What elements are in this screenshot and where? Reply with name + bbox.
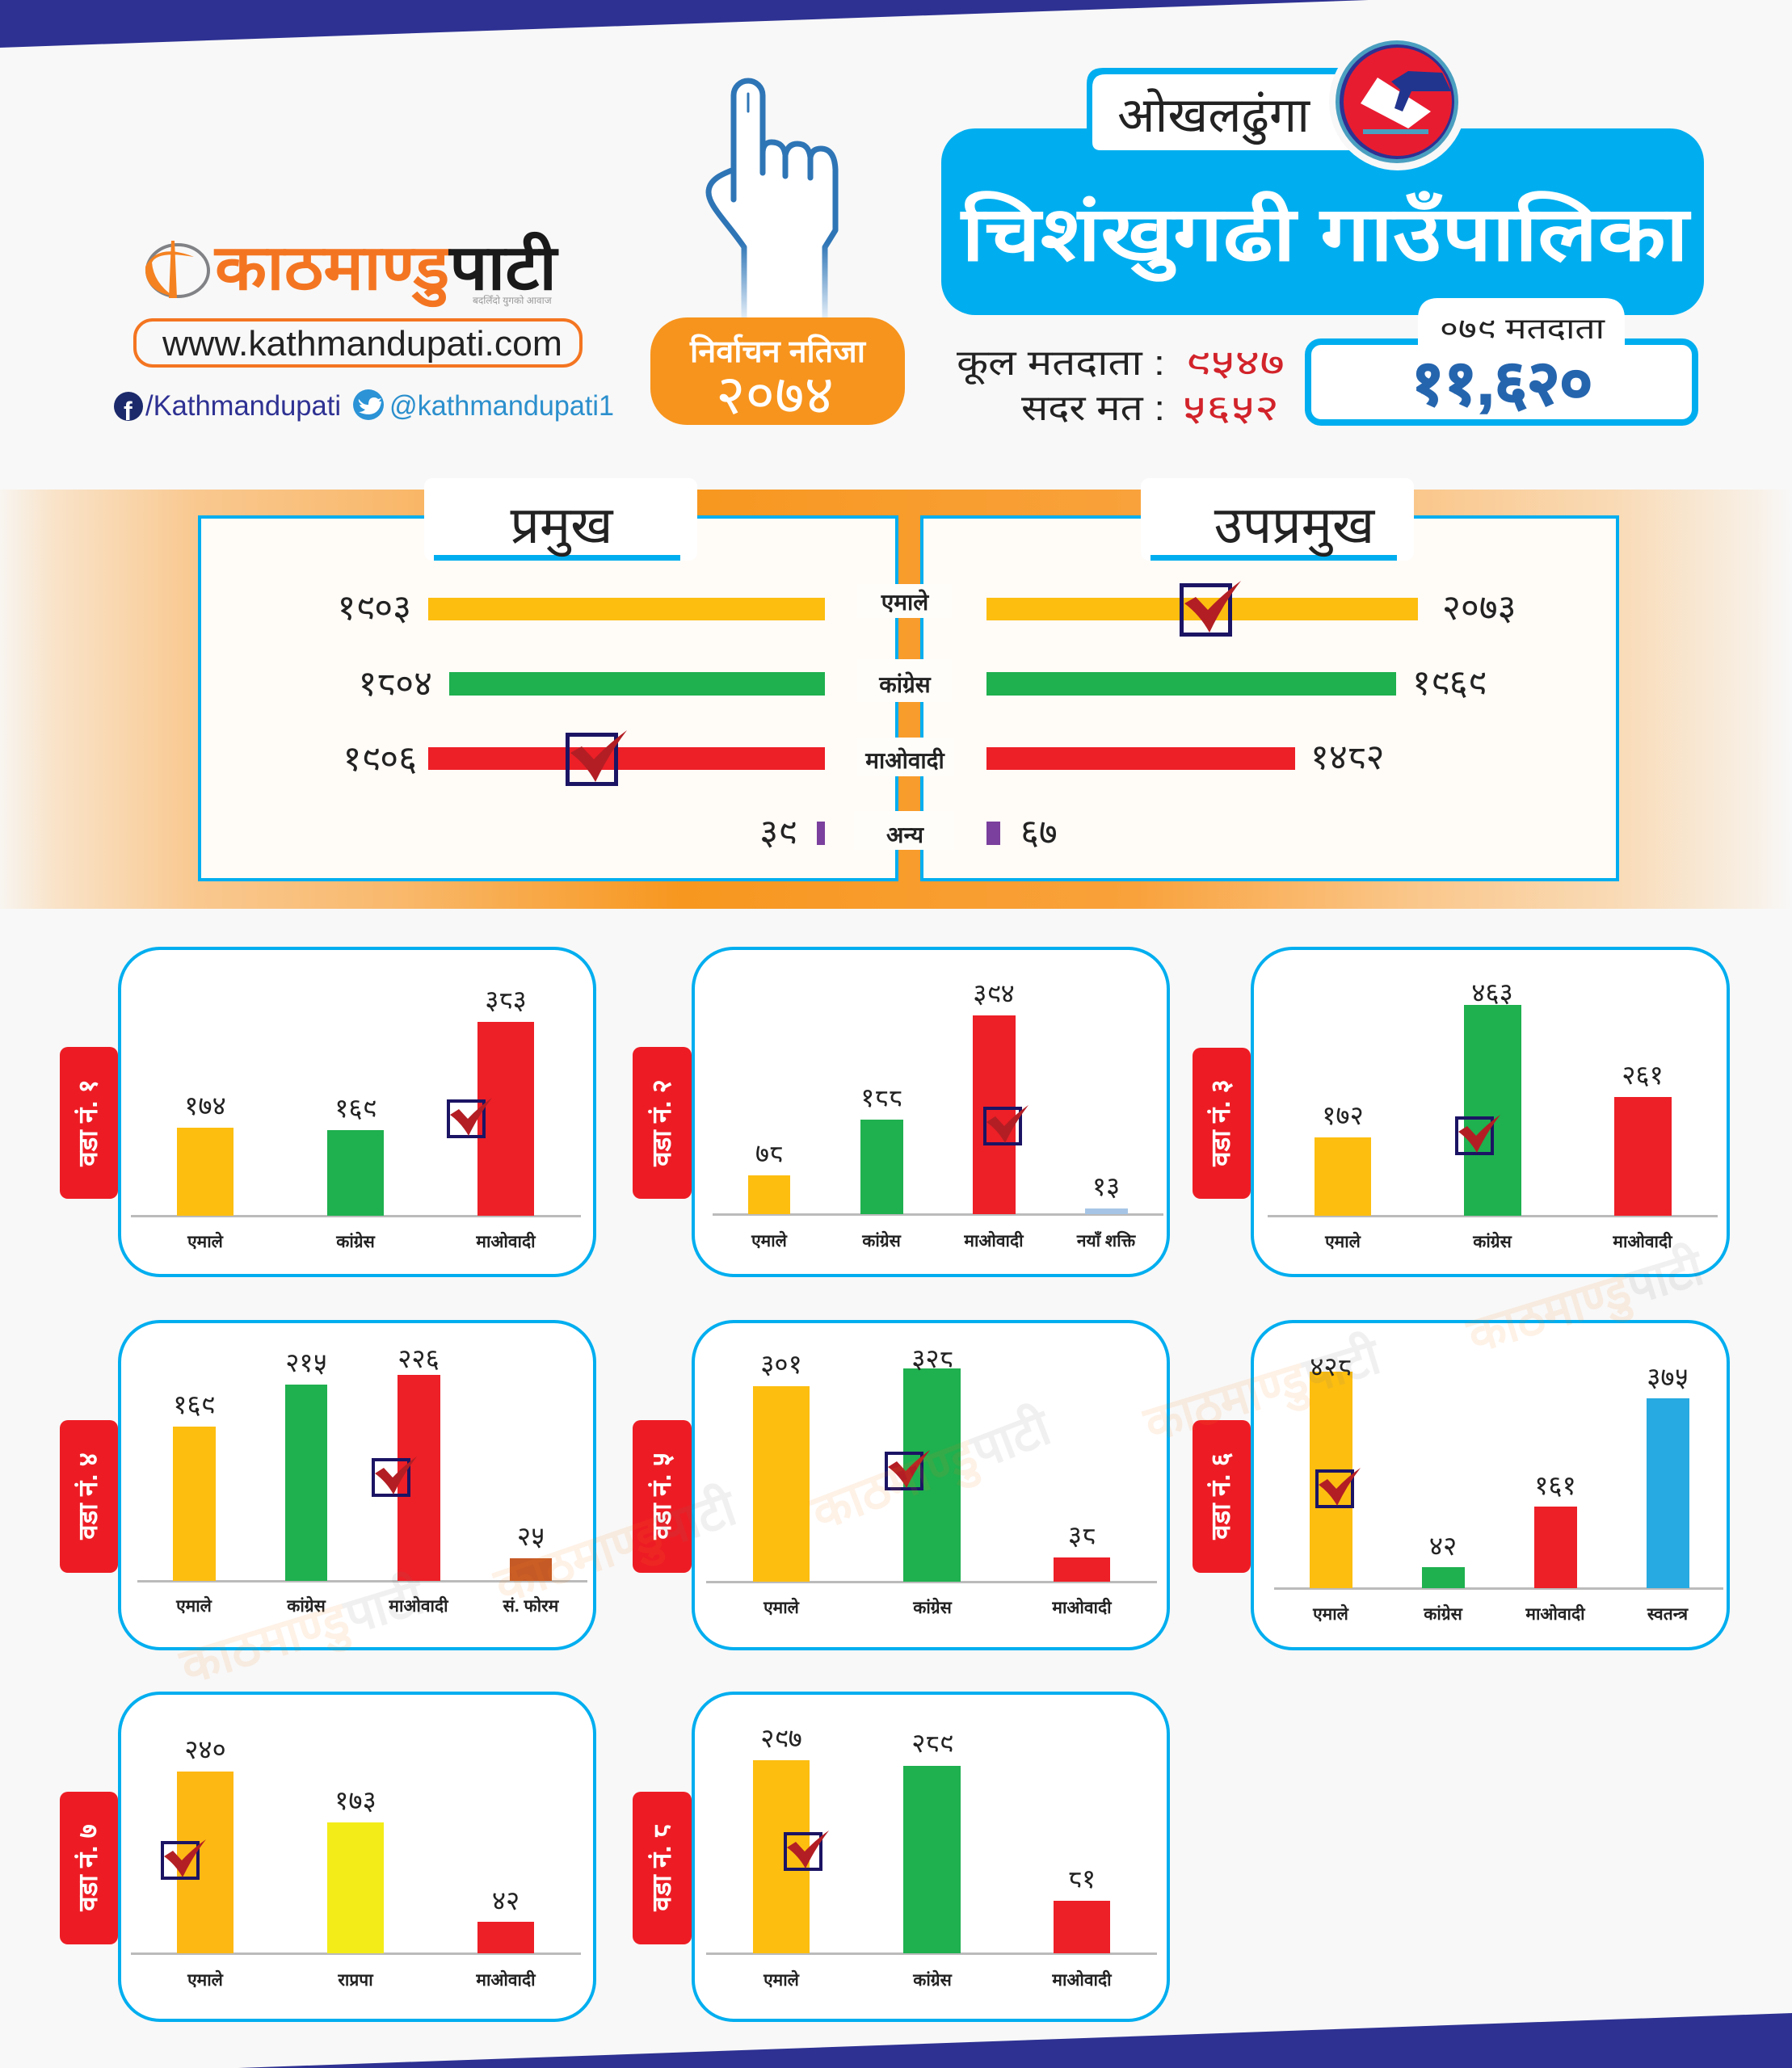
logo: Kathmandupati xyxy=(145,231,559,308)
ward 5 chart: ३२८ xyxy=(911,1343,953,1373)
top navy band xyxy=(0,0,1369,48)
ward 1 tab xyxy=(60,1047,118,1199)
icon: facebook: f xyxy=(124,397,133,426)
watermarks: काठमाण्डुपाटी xyxy=(803,1398,1061,1545)
ward 1 xyxy=(60,948,595,1276)
ward 7 chart: २४० xyxy=(184,1734,226,1764)
mayor heading tab xyxy=(424,478,697,561)
ward 3 chart: कांग्रेस xyxy=(1472,1231,1512,1251)
ward 3 chart: २६१ xyxy=(1622,1060,1664,1090)
ward 3 winner check xyxy=(1457,1115,1500,1154)
ward 2 chart: ३९४ xyxy=(973,978,1015,1008)
ward 6 chart: १६१ xyxy=(1534,1470,1576,1500)
municipality title panel xyxy=(941,33,1704,315)
ward 2 xyxy=(633,948,1168,1276)
district tab: ओखलढुंगा xyxy=(1117,88,1310,145)
ward 4 chart: १६९ xyxy=(173,1389,215,1419)
deputy value: Congress: १९६९ xyxy=(1412,663,1487,703)
ward 7 xyxy=(60,1693,595,2020)
ward 1 chart: १६९ xyxy=(334,1093,376,1123)
ward 4 xyxy=(60,1322,595,1649)
ward 3 tab: वडा नं. ३ xyxy=(1205,1079,1235,1167)
ward 6 chart: ४२ xyxy=(1429,1531,1457,1561)
ward 8 chart xyxy=(706,1723,1157,1990)
ward 4 tab: वडा नं. ४ xyxy=(73,1452,103,1540)
watermarks: काठमाण्डुपाटी xyxy=(1137,1326,1389,1456)
voters tab xyxy=(1418,298,1625,347)
ward 6 tab xyxy=(1193,1420,1251,1573)
ward 8 chart: २९७ xyxy=(760,1723,802,1753)
watermarks: काठमाण्डुपाटी xyxy=(487,1478,746,1617)
ward 3 tab xyxy=(1193,1048,1251,1199)
ward 6 chart: ४२८ xyxy=(1310,1351,1352,1381)
twitter handle: @kathmandupati1 xyxy=(389,390,614,422)
mayor bar: UML xyxy=(428,598,825,620)
ward 5 chart xyxy=(706,1343,1157,1617)
ward 1 tab: वडा नं. १ xyxy=(73,1079,103,1167)
ward 5 chart: ३८ xyxy=(1068,1520,1096,1550)
total voters text xyxy=(957,343,1285,428)
ward 8 winner check xyxy=(785,1831,829,1869)
ward 1 chart: १७४ xyxy=(184,1091,226,1120)
mayor bar: other xyxy=(817,822,825,845)
ward 8 chart: एमाले xyxy=(763,1969,800,1990)
ward 2 chart: एमाले xyxy=(751,1230,788,1250)
orange mayoral results band xyxy=(0,490,1792,909)
ward 1 card xyxy=(120,948,595,1276)
ward 5 chart: कांग्रेस xyxy=(912,1597,953,1617)
ward 2 tab: वडा नं. २ xyxy=(646,1079,676,1167)
deputy bar: Congress xyxy=(986,672,1396,696)
ward 8 xyxy=(633,1693,1168,2020)
deputy winner check xyxy=(1181,581,1241,635)
ward 3 chart xyxy=(1268,977,1718,1251)
election result badge: २०७४ xyxy=(716,364,834,426)
logo tagline: बदलिँदो युगको आवाज xyxy=(473,295,553,307)
ward 4 chart: सं. फोरम xyxy=(503,1595,560,1616)
ward 8 card xyxy=(693,1693,1168,2020)
deputy bar: other xyxy=(986,822,1000,845)
social links xyxy=(114,389,614,426)
ward 4 chart: कांग्रेस xyxy=(286,1595,326,1616)
ward 4 card xyxy=(120,1322,595,1649)
ward 3 chart: ४६३ xyxy=(1471,977,1513,1007)
ward 2 chart: १३ xyxy=(1092,1171,1120,1201)
ward 6 chart: कांग्रेस xyxy=(1423,1604,1463,1624)
ward 5 tab xyxy=(633,1420,692,1573)
mayor heading tab: प्रमुख xyxy=(510,496,614,557)
ward 1 chart: एमाले xyxy=(187,1231,224,1251)
ward 7 chart: ४२ xyxy=(492,1885,520,1915)
icon: facebook xyxy=(114,392,143,426)
watermarks xyxy=(173,1238,1712,1699)
mayor value: UML: १९०३ xyxy=(337,588,411,628)
election result badge xyxy=(650,317,905,426)
ward 3 chart: एमाले xyxy=(1324,1231,1361,1251)
deputy heading tab: उपप्रमुख xyxy=(1214,496,1376,557)
ward 7 chart: माओवादी xyxy=(475,1969,536,1990)
ward 1 winner check xyxy=(448,1098,492,1137)
ward 5 chart: माओवादी xyxy=(1051,1597,1113,1617)
watermarks: काठमाण्डुपाटी xyxy=(1460,1238,1712,1367)
valid votes value: ५६५२ xyxy=(1182,389,1279,428)
ward 7 chart: १७३ xyxy=(334,1785,376,1815)
ward 5 chart: एमाले xyxy=(763,1597,800,1617)
deputy heading tab xyxy=(1141,478,1414,561)
ward 8 tab xyxy=(633,1792,692,1944)
ward 8 chart: २८९ xyxy=(911,1728,953,1758)
deputy bar: Maoist xyxy=(986,747,1295,770)
ward 6 chart: माओवादी xyxy=(1525,1604,1586,1624)
ward 7 chart: राप्रपा xyxy=(337,1971,374,1990)
ward 7 chart: एमाले xyxy=(187,1969,224,1990)
ward 7 tab xyxy=(60,1792,118,1944)
ward 6 winner check xyxy=(1317,1468,1361,1507)
panel: mayor xyxy=(200,478,897,880)
icon: ballot box circle xyxy=(1329,33,1466,170)
deputy value: other: ६७ xyxy=(1020,813,1058,852)
ward 2 winner check xyxy=(985,1105,1029,1144)
ward 4 chart: २५ xyxy=(517,1521,545,1551)
deputy value: Maoist: १४८२ xyxy=(1310,738,1385,777)
ward 5 tab: वडा नं. ५ xyxy=(646,1452,676,1540)
municipality name: चिशंखुगढी गाउँपालिका xyxy=(960,191,1692,282)
ward 8 chart: ८१ xyxy=(1068,1864,1096,1894)
party label: UML xyxy=(857,584,952,618)
total voters value: ९५४७ xyxy=(1185,343,1285,383)
ward 4 chart: २२६ xyxy=(398,1343,440,1373)
ward 1 chart: माओवादी xyxy=(475,1231,536,1251)
party label: Maoist: माओवादी xyxy=(864,747,946,773)
party label: Maoist xyxy=(857,738,954,776)
ward 4 chart: एमाले xyxy=(175,1595,212,1616)
ward 6 chart: स्वतन्त्र xyxy=(1647,1605,1689,1624)
mayor value: other: ३९ xyxy=(759,813,797,852)
voters tab text: ०७९ मतदाता xyxy=(1440,312,1605,345)
party label: UML: एमाले xyxy=(881,589,929,615)
party label: Congress: कांग्रेस xyxy=(878,671,932,697)
ward 7 tab: वडा नं. ७ xyxy=(73,1824,103,1912)
party label: Congress xyxy=(857,659,952,702)
ward 3 xyxy=(1193,948,1728,1276)
ward 2 card xyxy=(693,948,1168,1276)
ward 6 chart xyxy=(1274,1351,1723,1624)
ward 2 chart xyxy=(713,978,1163,1250)
ward 2 chart: १८८ xyxy=(860,1082,902,1112)
party label: other: अन्य xyxy=(886,822,925,847)
ward 1 chart xyxy=(131,985,581,1251)
ward 8 tab: वडा नं. ८ xyxy=(646,1824,676,1912)
mayor winner check xyxy=(567,730,627,784)
ward 2 chart: नयाँ शक्ति xyxy=(1076,1230,1137,1250)
ward 8 chart: माओवादी xyxy=(1051,1969,1113,1990)
ward 3 chart: १७२ xyxy=(1322,1100,1364,1130)
district tab xyxy=(1087,68,1357,153)
voter count: ११,६२० xyxy=(1411,349,1592,418)
website box: www.kathmandupati.com xyxy=(162,324,562,364)
mayor bar: Congress xyxy=(449,672,825,696)
ward 6 card xyxy=(1252,1322,1728,1649)
deputy value: UML: २०७३ xyxy=(1442,588,1516,628)
party labels column xyxy=(854,584,954,850)
total voters row: कूल मतदाता : xyxy=(957,343,1165,385)
valid votes row: सदर मत : xyxy=(1021,389,1165,428)
ward 2 tab xyxy=(633,1047,692,1199)
ward 1 chart: कांग्रेस xyxy=(335,1231,376,1251)
ward 7 winner check xyxy=(162,1839,206,1878)
ward 1 chart: ३८३ xyxy=(485,985,527,1015)
icon: twitter xyxy=(353,389,384,420)
mayor bar: Maoist xyxy=(428,747,825,770)
ward 4 chart xyxy=(137,1343,587,1616)
mayor value: Maoist: १९०६ xyxy=(343,739,417,779)
ward 5 card xyxy=(693,1322,1168,1649)
ward 3 chart: माओवादी xyxy=(1612,1231,1673,1251)
ward 8 chart: कांग्रेस xyxy=(912,1969,953,1990)
mayor value: Congress: १८०४ xyxy=(358,664,432,704)
election result badge: निर्वाचन नतिजा xyxy=(689,334,866,369)
ward 3 card xyxy=(1252,948,1728,1276)
bottom navy band xyxy=(238,2013,1792,2068)
ward 4 winner check xyxy=(373,1456,417,1495)
ward 2 chart: कांग्रेस xyxy=(861,1230,902,1250)
ward 5 xyxy=(633,1322,1168,1649)
2079 voter count box xyxy=(1308,298,1695,422)
logo wordmark: काठमाण्डुपाटी xyxy=(213,231,559,308)
ward 2 chart: माओवादी xyxy=(963,1230,1024,1250)
icon: globe and tower xyxy=(145,241,208,298)
ward 7 card xyxy=(120,1693,595,2020)
panel: deputy mayor xyxy=(922,478,1617,880)
icon: voting finger hand xyxy=(709,81,835,318)
ward 4 tab xyxy=(60,1420,118,1573)
ward 6 chart: ३७५ xyxy=(1647,1362,1689,1392)
ward 4 chart: माओवादी xyxy=(388,1595,449,1616)
ward 5 winner check xyxy=(886,1450,930,1489)
deputy bar: UML xyxy=(986,598,1418,620)
ward 6 xyxy=(1193,1322,1728,1649)
watermarks: काठमाण्डुपाटी xyxy=(173,1566,433,1699)
party label: other xyxy=(854,811,954,850)
facebook handle: /Kathmandupati xyxy=(145,390,341,422)
ward 7 chart xyxy=(131,1734,581,1990)
ward 6 tab: वडा नं. ६ xyxy=(1205,1452,1235,1540)
ward 2 chart: ७८ xyxy=(755,1138,783,1168)
ward 4 chart: २१५ xyxy=(285,1347,327,1377)
ward 5 chart: ३०१ xyxy=(760,1349,802,1379)
ward 6 chart: एमाले xyxy=(1312,1604,1349,1624)
